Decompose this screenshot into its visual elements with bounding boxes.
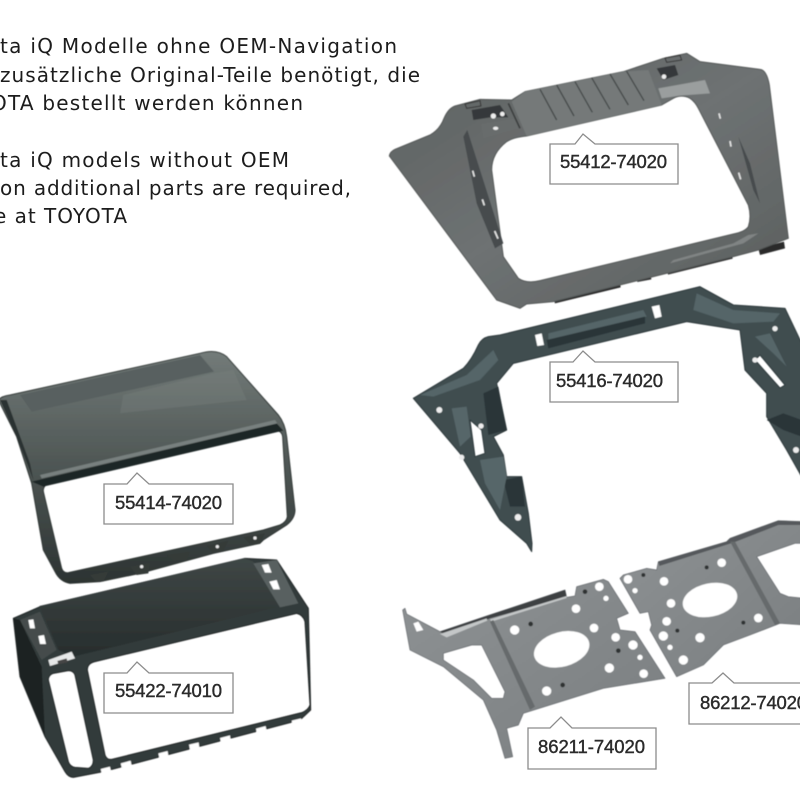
text block: German note: zusätzliche Original-Teile benötigt, die — [0, 63, 420, 87]
part: inner bracket frame 55416-74020 — [413, 287, 800, 552]
text block: English note: ta iQ models without OEM — [0, 148, 289, 172]
part: lower left bezel 55422-74010 — [13, 558, 311, 777]
label: 55416-74020: 55416-74020 — [556, 370, 663, 391]
text block: German note: ta iQ Modelle ohne OEM-Navigation — [0, 34, 397, 58]
label: 55422-74010: 55422-74010 — [115, 680, 222, 701]
part: right metal bracket 86212-74020 — [620, 521, 800, 677]
label: 55414-74020: 55414-74020 — [115, 492, 222, 513]
label: 86212-74020 — [689, 673, 800, 724]
text block: English note — [0, 148, 351, 228]
label: 55416-74020 — [550, 351, 678, 402]
part: left metal bracket 86211-74020 — [403, 579, 665, 758]
text block: English note: on additional parts are required, — [0, 176, 351, 200]
label: 86211-74020: 86211-74020 — [538, 736, 645, 757]
label: 55422-74010 — [104, 662, 233, 713]
label: 55412-74020: 55412-74020 — [560, 151, 667, 172]
part: upper bezel frame 55412-74020 — [389, 53, 788, 308]
label: 86211-74020 — [528, 717, 656, 769]
text block: German note — [0, 34, 420, 115]
part: upper left bezel 55414-74020 — [0, 351, 295, 583]
text block: German note: OTA bestellt werden können — [0, 91, 303, 115]
label: 55414-74020 — [104, 473, 233, 524]
label: 55412-74020 — [550, 134, 678, 184]
